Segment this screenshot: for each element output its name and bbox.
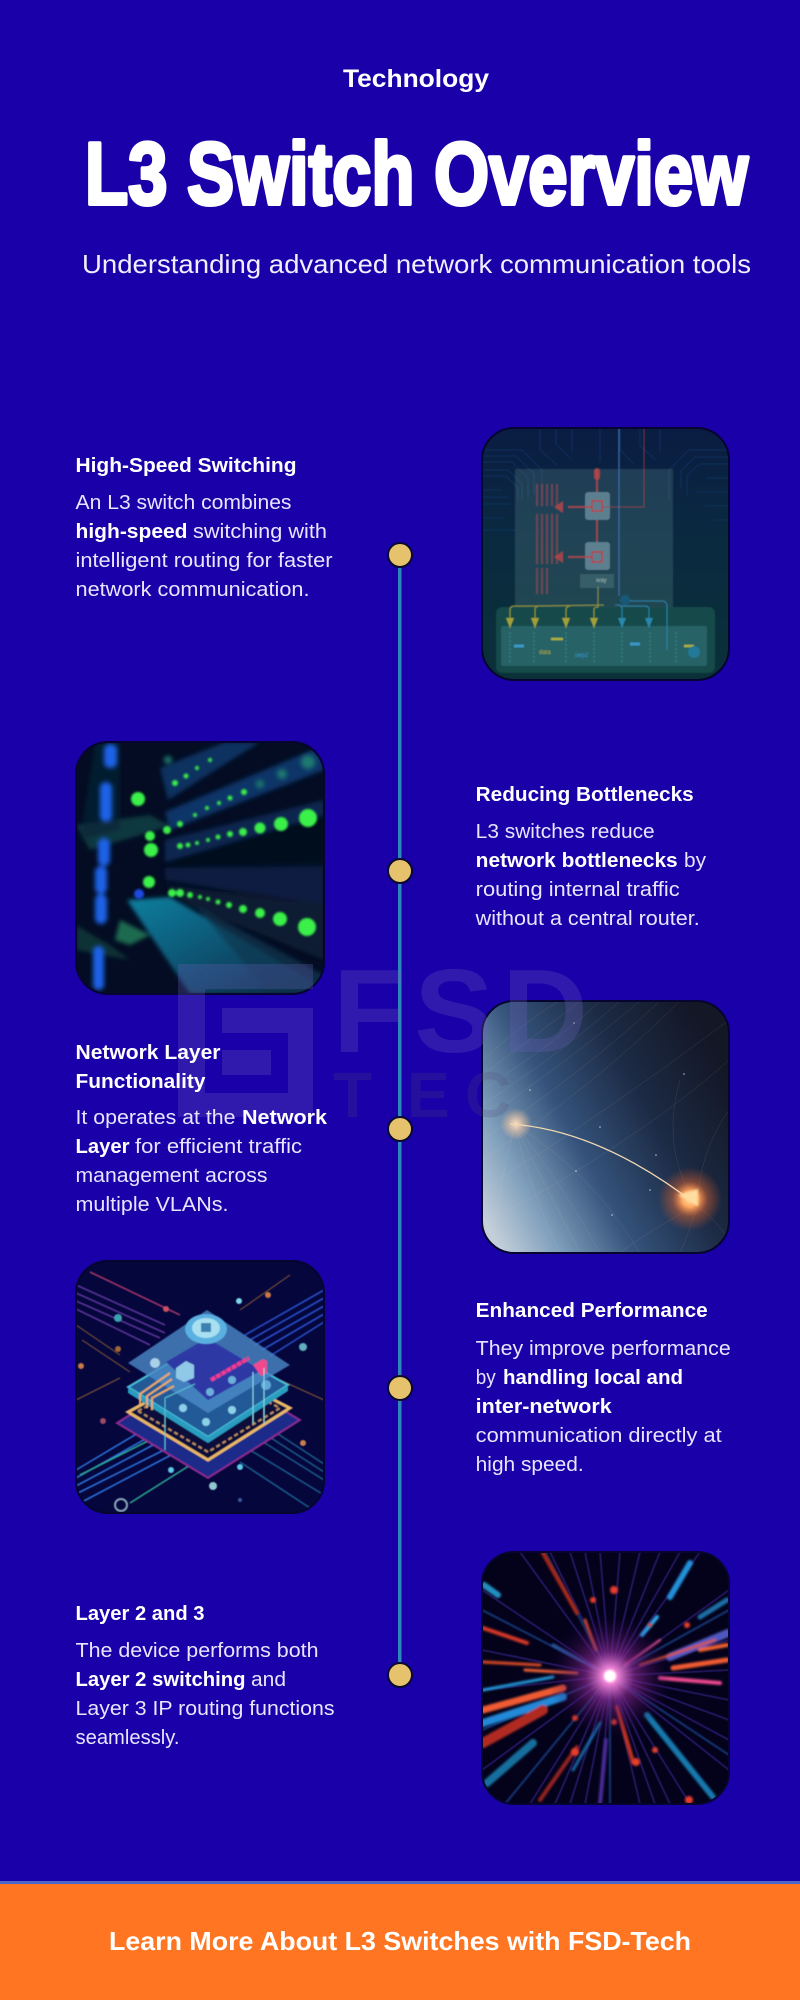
purple base layer [114, 1410, 302, 1480]
text block: Layer 2 and 3: Layer 2 and 3 [76, 1603, 204, 1625]
text block: Network Layer Functionality: for efficient traffic [135, 1136, 302, 1158]
text block: High-Speed Switching: intelligent routing for faster [76, 550, 333, 572]
timeline dot 3 [388, 1117, 412, 1141]
switch chassis [496, 607, 715, 673]
footer banner [0, 1881, 800, 2000]
text block: Layer 2 and 3 [76, 1603, 334, 1749]
subtitle: Understanding advanced network communication tools [82, 249, 751, 279]
image: radial light burst [482, 1552, 729, 1804]
footer call to action: Learn More About L3 Switches with FSD-Tech [109, 1926, 691, 1956]
text block: High-Speed Switching: High-Speed Switching [76, 455, 296, 477]
text block: Network Layer Functionality: Network [242, 1107, 328, 1129]
switch panel [515, 469, 673, 607]
text block: Enhanced Performance: by [476, 1367, 496, 1389]
text block: Layer 2 and 3: and [251, 1669, 286, 1691]
text block: Enhanced Performance: Enhanced Performance [476, 1300, 708, 1322]
text block: Network Layer Functionality [76, 1042, 328, 1216]
text block: Layer 2 and 3: seamlessly. [76, 1727, 180, 1749]
text block: Network Layer Functionality: It operates at the [76, 1107, 236, 1129]
text block: Network Layer Functionality: management across [76, 1165, 268, 1187]
text block: Layer 2 and 3: The device performs both [76, 1640, 318, 1662]
logo word TEC: T [333, 1059, 372, 1131]
logo word TEC: C [465, 1059, 511, 1131]
text block: Enhanced Performance: communication directly at [476, 1425, 722, 1447]
text block: Enhanced Performance: They improve performance [476, 1338, 731, 1360]
image: circuit diagram of switch: data [539, 650, 551, 656]
text block: Layer 2 and 3: Layer 3 IP routing functions [76, 1698, 334, 1720]
text block: Network Layer Functionality: Network Layer [76, 1042, 221, 1064]
logo word TEC [333, 1059, 511, 1131]
text block: Enhanced Performance: inter-network [476, 1396, 613, 1418]
image: layered isometric chip [76, 1261, 324, 1513]
text block: Layer 2 and 3: Layer 2 switching [76, 1669, 246, 1691]
logo word FSD: FSD [333, 945, 588, 1078]
image: orange data trail [482, 1001, 729, 1253]
text block: High-Speed Switching [76, 455, 333, 601]
timeline dot 4 [388, 1376, 412, 1400]
rack bands [165, 745, 324, 830]
text block: Enhanced Performance: handling local and [503, 1367, 683, 1389]
text block: Network Layer Functionality: multiple VLANs. [76, 1194, 228, 1216]
text block: High-Speed Switching: An L3 switch combines [76, 492, 292, 514]
header [82, 65, 751, 279]
gold wires [140, 1373, 174, 1410]
text block: Reducing Bottlenecks: routing internal traffic [476, 879, 680, 901]
teal middle layer [128, 1340, 288, 1437]
chips [585, 492, 610, 520]
image: circuit diagram of switch: way [595, 578, 607, 584]
timeline dot 2 [388, 859, 412, 883]
text block: Reducing Bottlenecks: network bottlenecks [476, 850, 678, 872]
image: circuit diagram of switch [482, 427, 729, 680]
pink bar and icons [211, 1358, 249, 1380]
text block: High-Speed Switching: switching with [193, 521, 327, 543]
watermark: FSD Tech logo [178, 945, 588, 1131]
timeline dot 5 [388, 1663, 412, 1687]
text block: Reducing Bottlenecks: L3 switches reduce [476, 821, 655, 843]
green LEDs [131, 758, 317, 936]
trail [510, 1124, 697, 1205]
top glass layer [128, 1310, 290, 1413]
data lines [76, 1272, 324, 1508]
blue lozenges [93, 744, 117, 990]
image: server rack with green LEDs [76, 742, 324, 994]
text block: Reducing Bottlenecks: without a central router. [475, 908, 700, 930]
category label: Technology [343, 65, 489, 93]
logo word TEC: E [407, 1059, 450, 1131]
text block: High-Speed Switching: high-speed [76, 521, 188, 543]
text block: High-Speed Switching: network communication. [76, 579, 310, 601]
logo mark [178, 964, 313, 1117]
timeline line [398, 555, 402, 1675]
gold circuit layer [124, 1398, 294, 1462]
text block: Reducing Bottlenecks: by [684, 850, 706, 872]
text block: Network Layer Functionality: Layer [76, 1136, 130, 1158]
timeline dot 1 [388, 543, 412, 567]
text block: Network Layer Functionality: Functionality [76, 1071, 206, 1093]
timeline [388, 543, 412, 1687]
text block: Enhanced Performance: high speed. [476, 1454, 584, 1476]
image: circuit diagram of switch: iarp2 [575, 653, 589, 659]
text block: Enhanced Performance [476, 1300, 731, 1476]
text block: Reducing Bottlenecks: Reducing Bottlenecks [476, 784, 694, 806]
thin purple and navy rays [482, 1552, 729, 1804]
text block: Reducing Bottlenecks [475, 784, 706, 930]
